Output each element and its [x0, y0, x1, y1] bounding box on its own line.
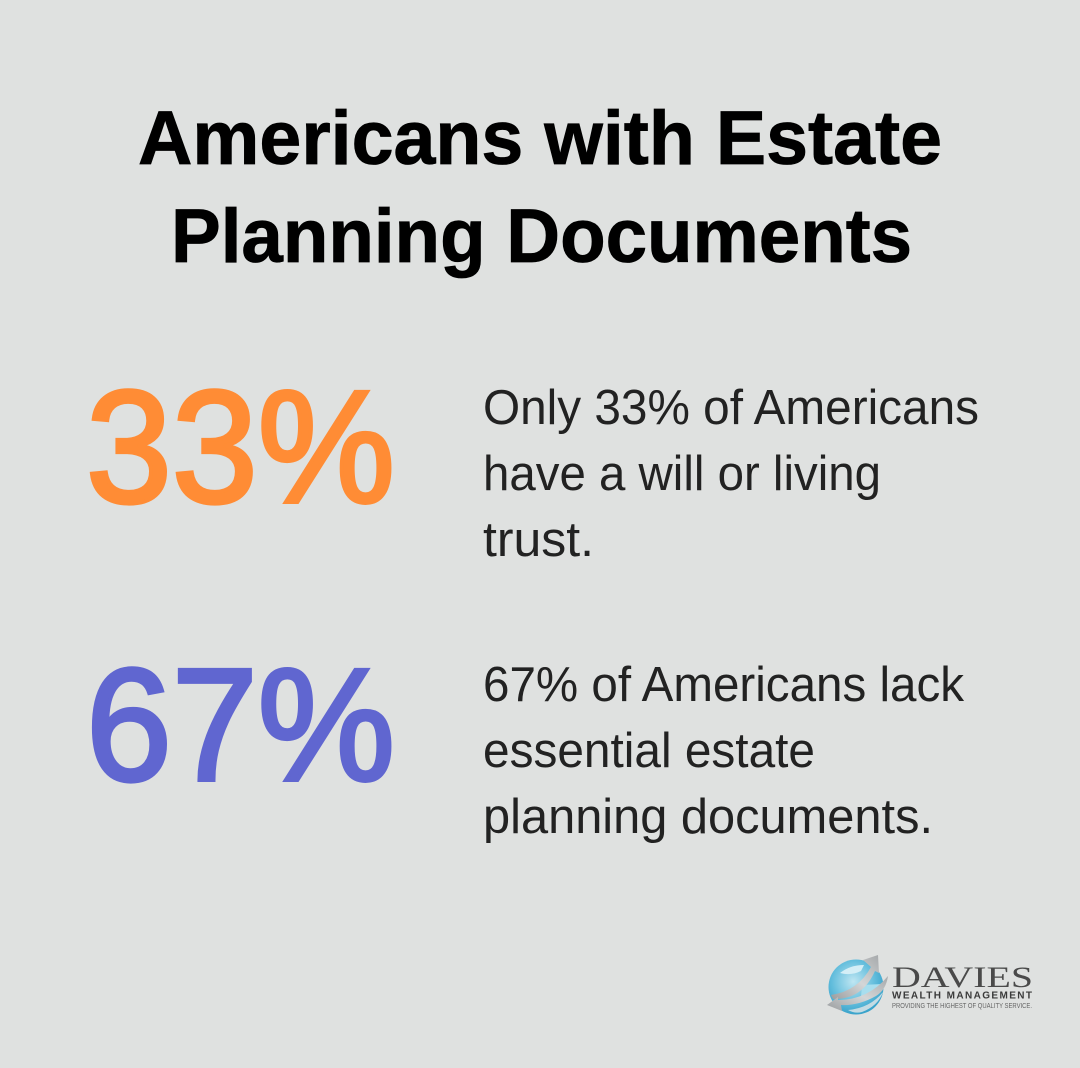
description: 33%: trust.	[483, 513, 594, 567]
icon: globe with arrows	[827, 955, 888, 1014]
tagline: PROVIDING THE HIGHEST OF QUALITY SERVICE.	[892, 1003, 1032, 1010]
wordmark: DAVIES	[892, 961, 1033, 994]
title: Americans with Estate	[138, 96, 942, 181]
description: 67%: planning documents.	[483, 790, 933, 844]
stat: 33%: 33%	[86, 357, 395, 536]
description: 33%: Only 33% of Americans	[483, 381, 979, 435]
description: 67%	[483, 658, 964, 844]
description: 33%: have a will or living	[483, 447, 881, 501]
description: 67%: 67% of Americans lack	[483, 658, 964, 712]
title: Planning Documents	[171, 194, 912, 279]
title	[138, 96, 942, 279]
description: 67%: essential estate	[483, 724, 815, 778]
stat: 67%: 67%	[86, 635, 395, 814]
description: 33%	[483, 381, 979, 567]
wordmark subtitle: WEALTH MANAGEMENT	[892, 990, 1032, 1002]
logo: Davies Wealth Management	[827, 955, 1033, 1014]
